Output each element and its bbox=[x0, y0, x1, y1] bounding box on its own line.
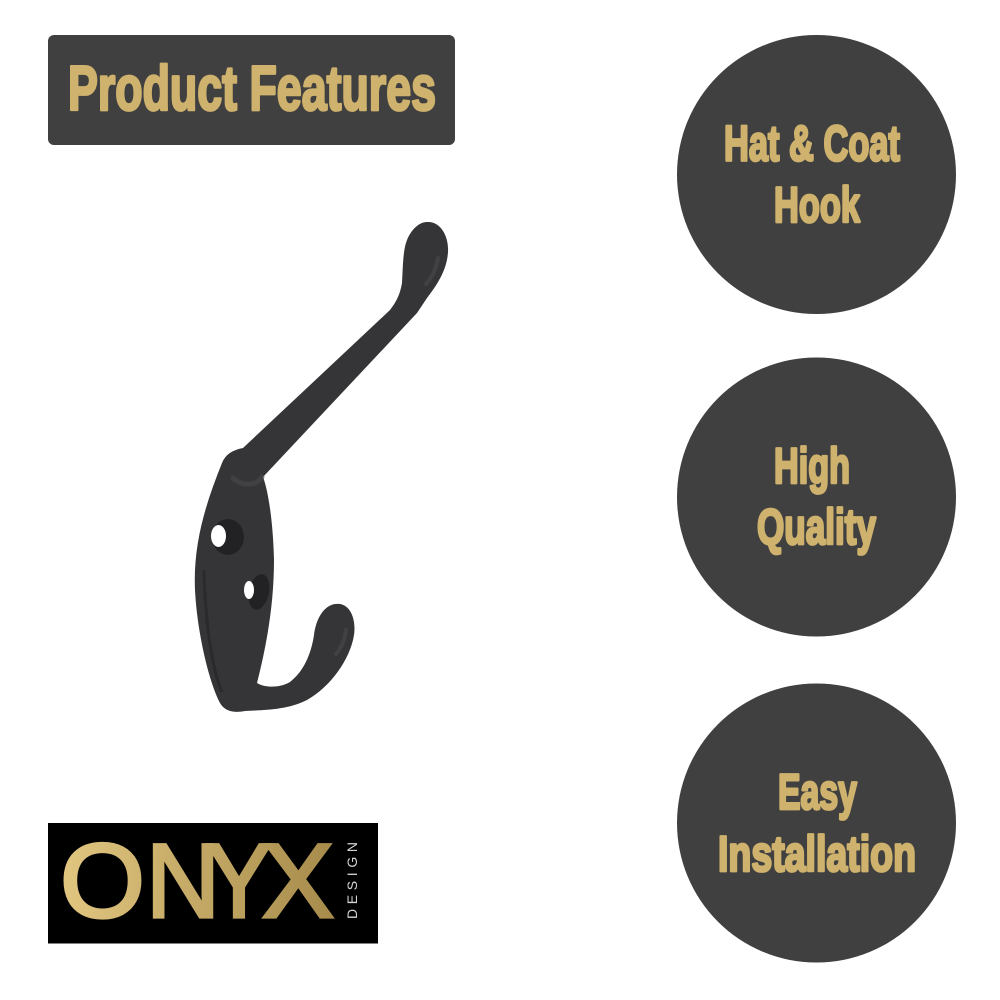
badge: Easy Installation bbox=[677, 684, 956, 962]
badge: Easy Installation: Installation bbox=[718, 826, 916, 882]
logo wordmark: ONYX bbox=[60, 823, 334, 940]
badge: High Quality: High bbox=[774, 438, 850, 494]
heading: Product Features bbox=[48, 35, 455, 145]
logo wordmark: ONYX: O bbox=[60, 823, 145, 940]
icon: black hat and coat hook bbox=[195, 222, 448, 712]
logo wordmark: DESIGN: DESIGN bbox=[344, 842, 360, 919]
badge: High Quality bbox=[677, 358, 956, 636]
badge: Hat & Coat Hook: Hat & Coat bbox=[724, 116, 900, 172]
heading: Product Features: Product Features bbox=[68, 54, 436, 124]
badge: Easy Installation: Easy bbox=[778, 764, 857, 820]
logo wordmark: ONYX: N bbox=[146, 823, 220, 940]
logo wordmark: ONYX: X bbox=[262, 823, 334, 940]
badge: Hat & Coat Hook bbox=[677, 35, 956, 314]
logo: ONYX Design bbox=[48, 823, 378, 944]
badge: Hat & Coat Hook: Hook bbox=[774, 177, 860, 233]
badge: High Quality: Quality bbox=[757, 499, 876, 555]
logo wordmark: ONYX: Y bbox=[206, 823, 272, 940]
